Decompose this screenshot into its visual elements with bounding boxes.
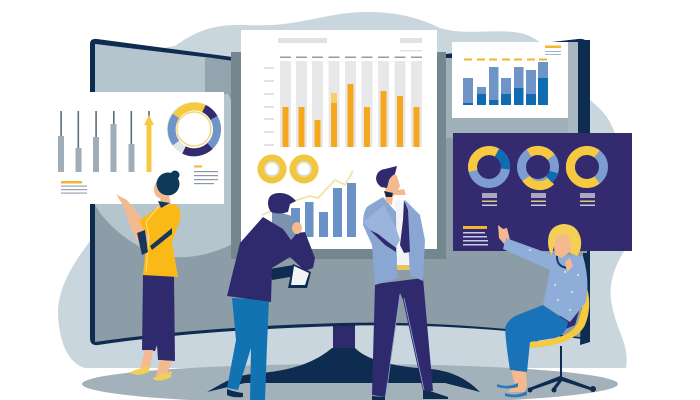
bar chart: orange columns (280, 56, 422, 147)
figure: man with clipboard (227, 193, 315, 400)
chair (528, 253, 596, 392)
header placeholders (264, 38, 422, 146)
bar chart: thin columns (58, 111, 154, 172)
donut three (570, 150, 604, 184)
legend blocks (482, 193, 595, 198)
panel: top right chart (452, 42, 568, 118)
panel: purple donut dashboard (453, 133, 632, 251)
figure: seated woman (497, 224, 587, 397)
floor ellipse (82, 364, 618, 400)
clipboard (288, 264, 311, 288)
figure: thinking man (363, 166, 448, 400)
legend (194, 166, 218, 184)
panel: center chart card (241, 30, 437, 249)
donut one (472, 150, 506, 184)
donut two (522, 150, 554, 186)
monitor stand (207, 322, 480, 392)
panel: center chart shadow (231, 52, 446, 259)
panel: left chart card (50, 92, 224, 204)
monitor (90, 39, 590, 345)
pointing hand (498, 225, 510, 245)
background blob (58, 12, 632, 368)
trend line (262, 171, 353, 215)
hair (268, 193, 296, 214)
bar chart: blue (291, 183, 356, 237)
icon: yellow rings (261, 158, 315, 180)
donut chart (171, 106, 217, 152)
figure: woman pointing (116, 170, 180, 381)
